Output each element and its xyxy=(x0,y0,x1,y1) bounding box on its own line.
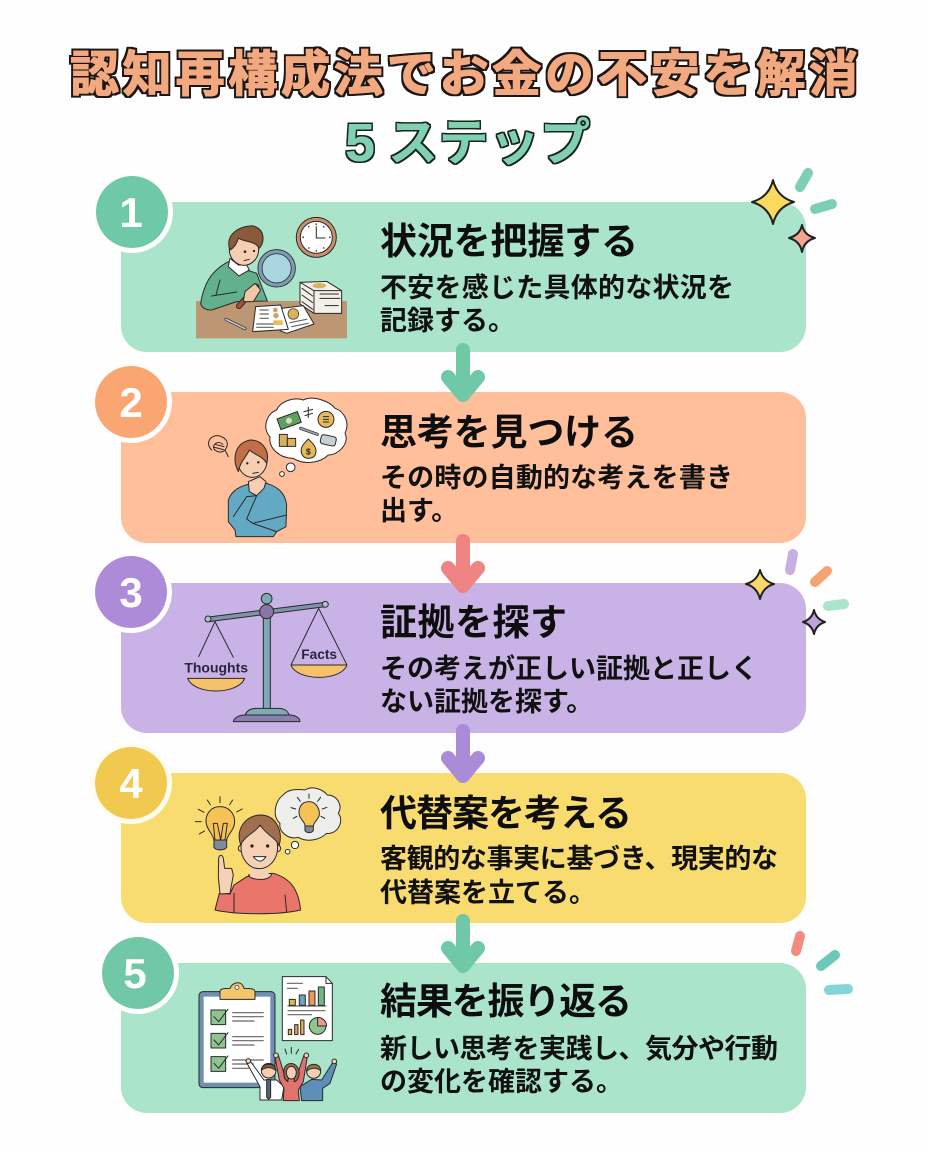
sparkle dashes: step 5 xyxy=(796,936,848,990)
panel: step 2 xyxy=(90,361,806,543)
step 5 number badge: 5 xyxy=(123,950,147,997)
person: left cheering xyxy=(247,1061,284,1100)
person: centre cheering xyxy=(246,1053,309,1101)
panel: step 4 xyxy=(90,742,806,923)
arrow: step 2 to 3 xyxy=(448,541,478,586)
arrow: step 1 to 2 xyxy=(448,350,478,395)
step 1 description: 不安を感じた具体的な状況を xyxy=(380,266,734,305)
title: 認知再構成法でお金の不安を解消 xyxy=(70,35,858,106)
step 1 number badge xyxy=(91,171,173,253)
step 3 description: ない証拠を探す。 xyxy=(380,680,593,719)
step 4 description: 客観的な事実に基づき、現実的な xyxy=(380,837,778,876)
step 1 heading: 状況を把握する xyxy=(380,211,638,265)
sparkles: step 1 xyxy=(752,173,832,252)
label: Facts: Facts xyxy=(301,647,337,662)
step 3 description: その考えが正しい証拠と正しく xyxy=(380,647,758,686)
step 2 number badge: 2 xyxy=(119,379,143,426)
label: Thoughts: Thoughts xyxy=(184,659,248,675)
icon: person inspecting papers with magnifier xyxy=(196,217,347,338)
step 5 description: 新しい思考を実践し、気分や行動 xyxy=(380,1027,778,1066)
icon: person with idea lightbulbs xyxy=(195,788,341,914)
icon: balance scale of thoughts and facts xyxy=(184,593,347,722)
step 3 heading: 証拠を探す xyxy=(380,592,567,646)
subtitle: 5 xyxy=(345,113,375,173)
person: right cheering xyxy=(300,1059,337,1101)
panel: step 5 xyxy=(97,932,806,1113)
subtitle: ステップ xyxy=(388,103,590,175)
arrow: step 3 to 4 xyxy=(448,731,478,776)
step 2 description: その時の自動的な考えを書き xyxy=(380,456,733,495)
step 2 description: 出す。 xyxy=(380,489,458,528)
step 1 description: 記録する。 xyxy=(380,299,515,338)
step 5 number badge xyxy=(97,932,179,1014)
step 3 number badge: 3 xyxy=(119,569,143,616)
step 2 number badge xyxy=(90,361,172,443)
step 2 heading: 思考を見つける xyxy=(380,402,638,456)
icon: checklist, report and cheering team xyxy=(199,977,337,1101)
step 5 heading: 結果を振り返る xyxy=(380,971,632,1025)
icon: person thinking about money xyxy=(209,398,347,537)
step 4 heading: 代替案を考える xyxy=(380,783,632,837)
icon: person thinking about money: $ xyxy=(306,446,311,456)
panel: step 1 xyxy=(91,171,806,352)
step 3 number badge xyxy=(90,551,172,633)
sparkles: step 3 xyxy=(746,554,844,634)
step 5 description: の変化を確認する。 xyxy=(380,1060,623,1099)
step 4 number badge xyxy=(90,742,172,824)
step 4 number badge: 4 xyxy=(119,760,143,807)
panel: step 3 xyxy=(90,551,806,733)
arrow: step 4 to 5 xyxy=(448,921,478,966)
step 4 description: 代替案を立てる。 xyxy=(380,871,596,910)
step 1 number badge: 1 xyxy=(119,189,143,236)
